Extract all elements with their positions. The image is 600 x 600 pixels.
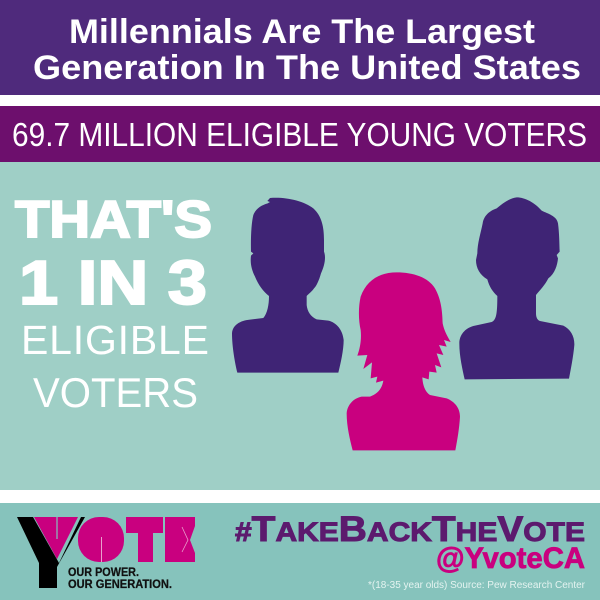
- handle: @YvoteCA: [436, 542, 585, 575]
- logo: vote: [17, 517, 195, 591]
- logo tagline: [68, 565, 172, 591]
- logo letter E: [165, 517, 195, 562]
- logo tagline: OUR POWER.: [68, 565, 139, 579]
- panel: teal main area: [0, 162, 600, 490]
- title: Millennials Are The Largest: [69, 13, 535, 51]
- text: that's 1 in 3 eligible voters: 1 IN 3: [19, 249, 207, 318]
- text: that's 1 in 3 eligible voters: [15, 191, 212, 416]
- icon: female silhouette centre: [347, 272, 460, 450]
- panel: subtitle banner: [0, 106, 600, 162]
- logo letter O: [78, 517, 124, 562]
- panel: title banner: [0, 0, 600, 95]
- panel: footer: [0, 503, 600, 600]
- text: that's 1 in 3 eligible voters: VOTERS: [33, 369, 198, 416]
- logo letter V: [34, 517, 78, 559]
- logo letter Y: [17, 517, 85, 588]
- text: that's 1 in 3 eligible voters: THAT'S: [15, 191, 212, 249]
- hashtag: #TAKEBACKTHEVOTE: [235, 510, 585, 549]
- text: that's 1 in 3 eligible voters: ELIGIBLE: [21, 317, 209, 363]
- source note: *(18-35 year olds) Source: Pew Research Center: [368, 580, 586, 591]
- icon: male silhouette left: [232, 198, 344, 373]
- title: Generation In The United States: [33, 49, 581, 87]
- icon: male silhouette right: [459, 197, 574, 379]
- title: [33, 13, 581, 87]
- logo tagline: OUR GENERATION.: [68, 577, 172, 591]
- logo letter T: [126, 517, 163, 562]
